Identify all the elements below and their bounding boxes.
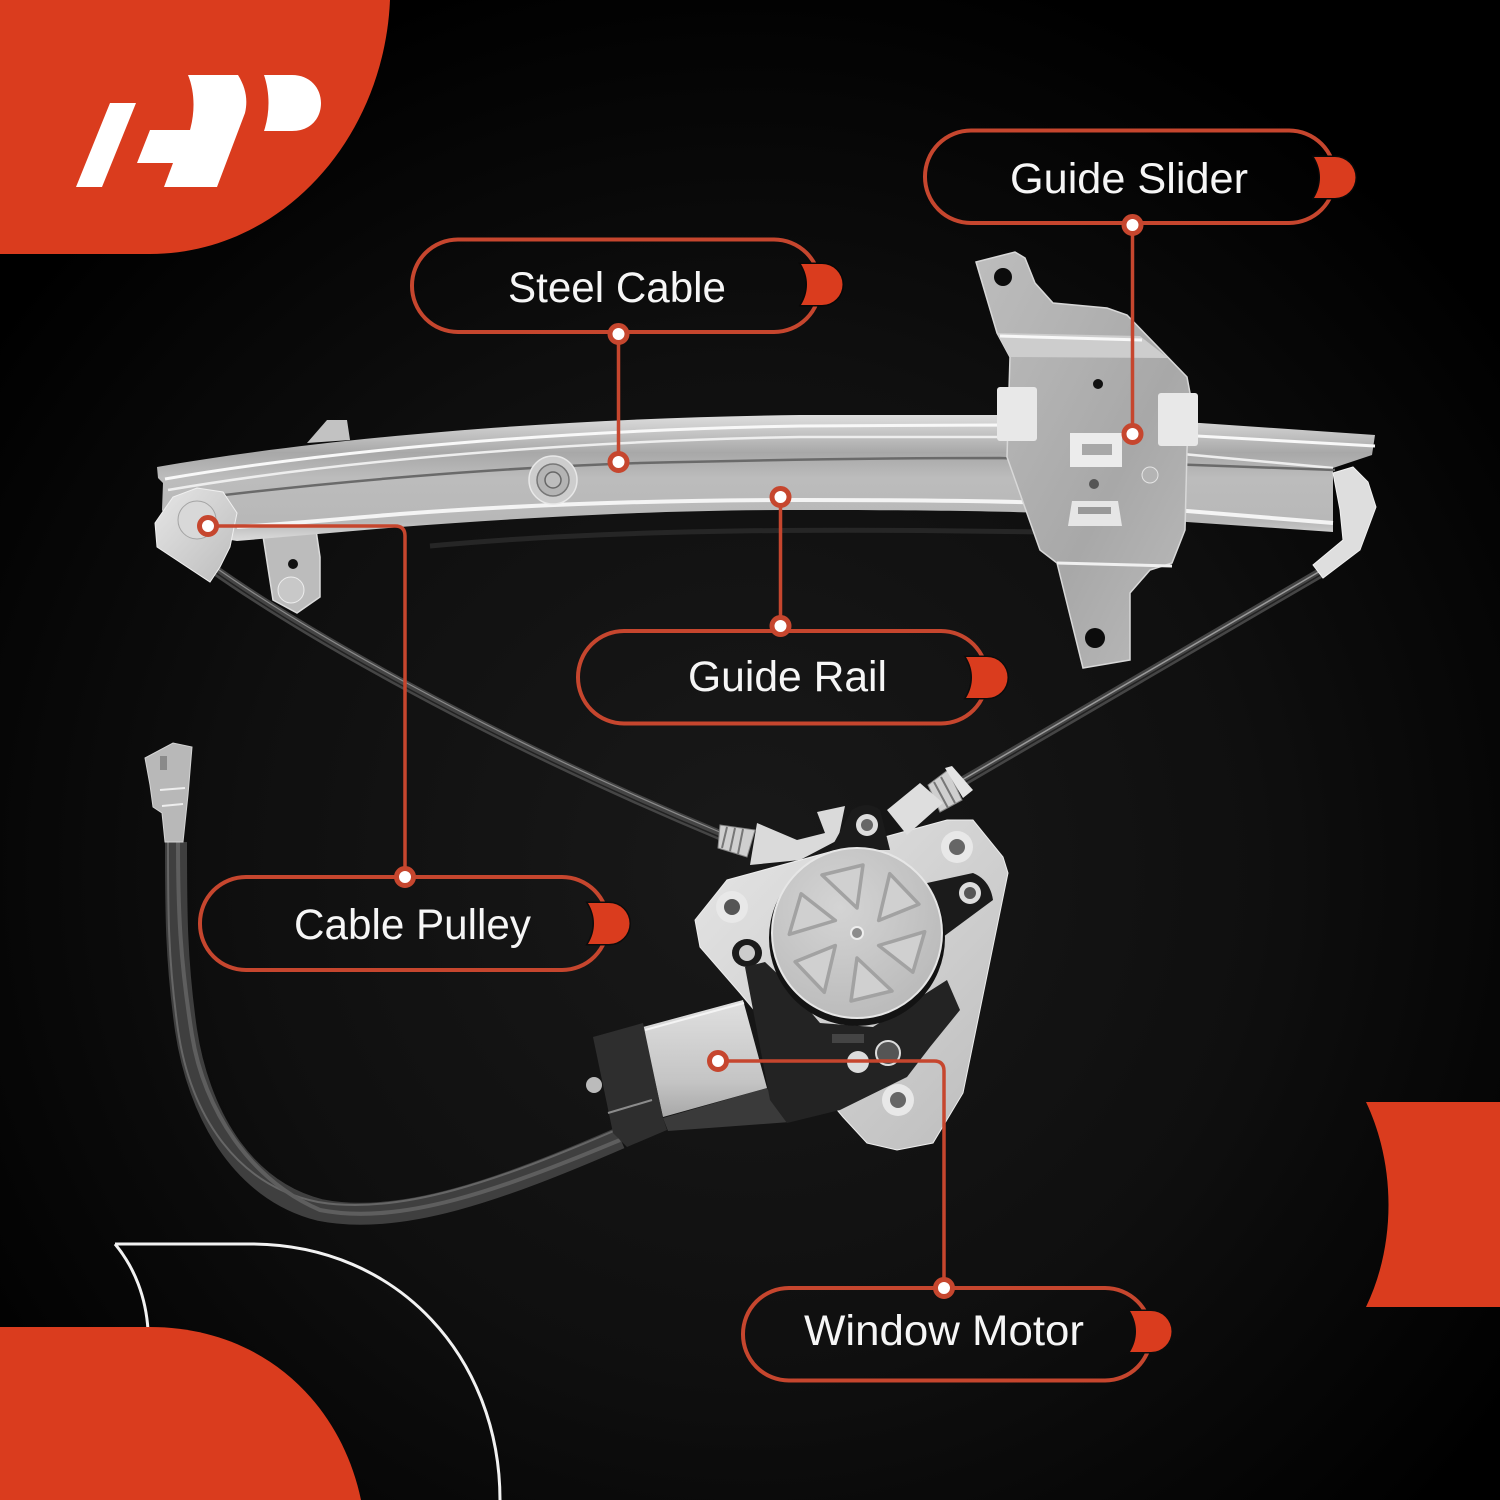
motor can <box>643 1000 767 1117</box>
callout: Window Motor: Window Motor <box>804 1307 1084 1355</box>
cable fittings <box>718 766 973 865</box>
gear wheel <box>769 848 945 1026</box>
motor assembly <box>586 766 1008 1150</box>
callout: Steel Cable <box>412 240 842 470</box>
plate bolts <box>716 814 981 1116</box>
callout: Guide Rail <box>578 488 1007 724</box>
callout: Steel Cable: Steel Cable <box>508 264 726 312</box>
callout: Guide Slider: Guide Slider <box>1010 155 1248 203</box>
pulley: right <box>1313 467 1376 578</box>
slider clips <box>997 387 1198 526</box>
motor end cap <box>586 1023 667 1147</box>
wiring harness <box>168 842 620 1214</box>
pulley: left <box>155 488 237 582</box>
callout: Window Motor <box>710 1052 1172 1380</box>
cable: left <box>212 565 722 838</box>
housing bolts <box>832 1034 900 1073</box>
wire bundle under motor <box>663 1088 790 1131</box>
rail reflection <box>430 530 1040 546</box>
wheel windows <box>781 865 933 1001</box>
corner shape: right <box>1366 1102 1500 1307</box>
window regulator product <box>145 130 1376 1380</box>
guide rail <box>157 415 1375 613</box>
callout: Cable Pulley <box>200 518 629 970</box>
connector plug <box>145 743 192 842</box>
callout: Guide Slider <box>925 130 1355 442</box>
black arms <box>732 805 993 967</box>
slider bracket <box>976 252 1198 668</box>
corner shape: bottom-left <box>0 1244 500 1500</box>
cable: right <box>955 570 1322 788</box>
rail highlights <box>165 425 1375 527</box>
callout: Guide Rail: Guide Rail <box>688 653 887 701</box>
mounting plate <box>695 820 1008 1150</box>
callout: Cable Pulley: Cable Pulley <box>294 901 531 949</box>
corner panel: logo <box>0 0 390 254</box>
gearbox housing <box>745 962 960 1123</box>
logo mark <box>76 75 321 187</box>
